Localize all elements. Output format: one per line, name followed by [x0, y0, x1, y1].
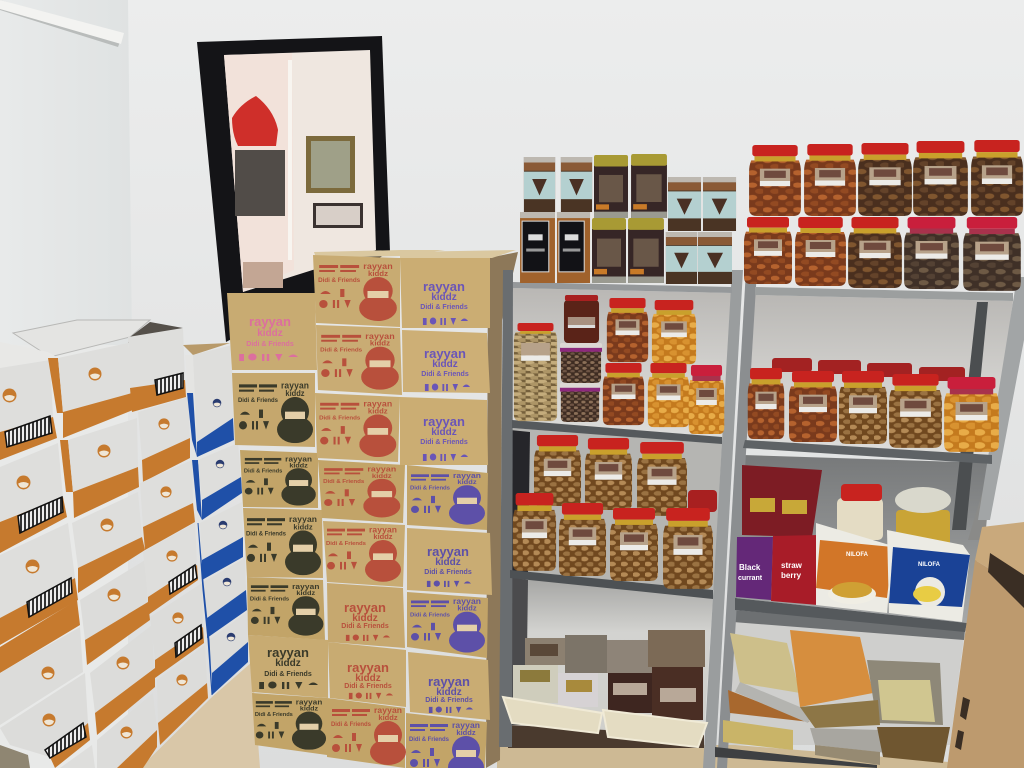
- shelf unit frames: [499, 270, 1024, 768]
- carton red 5: Didi & Friends: [326, 541, 367, 547]
- orange mango box: [816, 523, 893, 613]
- carton purple 5 logo: [407, 528, 492, 595]
- large cardboard box bottom right: [947, 522, 1024, 768]
- carton red 7 logo: Didi & Friends: [344, 683, 392, 690]
- carton purple 3 logo: Didi & Friends: [420, 439, 468, 446]
- baskets with snack packs: [503, 630, 707, 747]
- carton purple 1 logo: rayyan: [423, 279, 465, 294]
- carton dark 6: kiddz: [300, 706, 319, 713]
- carton red 4: Didi & Friends: [323, 479, 364, 485]
- carton purple 8: Didi & Friends: [409, 737, 450, 743]
- carton purple 6: rayyan: [453, 597, 481, 606]
- carton dark 5 logo: [248, 635, 328, 698]
- clear snack bags: [607, 630, 705, 720]
- brown cartons: middle column: [313, 250, 445, 768]
- carton dark 4: rayyan: [292, 582, 320, 591]
- carton dark 2: Didi & Friends: [244, 469, 282, 474]
- carton purple 5 logo: kiddz: [435, 557, 461, 568]
- carton purple 8: rayyan: [452, 720, 480, 730]
- carton dark 4: Didi & Friends: [250, 597, 289, 603]
- carton purple 6: kiddz: [457, 604, 477, 613]
- carton purple 3 logo: rayyan: [423, 414, 465, 429]
- carton red 6 logo: rayyan: [344, 600, 386, 615]
- carton red 2: Didi & Friends: [320, 347, 363, 353]
- carton purple 7 logo: rayyan: [428, 674, 470, 689]
- carton pink: kiddz: [257, 328, 283, 339]
- carton purple 5 logo: rayyan: [427, 544, 469, 559]
- left shelf level 2 jars: [513, 435, 717, 589]
- carton dark 6: Didi & Friends: [255, 712, 293, 718]
- carton purple 2 logo: [402, 330, 490, 393]
- carton red 6 logo: Didi & Friends: [341, 623, 389, 630]
- red foil bags: [742, 465, 822, 537]
- carton red 7 logo: rayyan: [347, 660, 389, 675]
- blue banana box: NILOFA: [918, 562, 941, 568]
- yellow biscuit jar: [895, 487, 951, 546]
- carton dark 1: kiddz: [285, 389, 305, 398]
- carton dark 6: [252, 693, 327, 755]
- carton red 7 logo: kiddz: [355, 673, 381, 684]
- brown cartons: right column: [400, 250, 518, 768]
- carton purple 5 logo: Didi & Friends: [424, 569, 472, 576]
- column 4 with blue bands: [183, 343, 230, 355]
- carton red 1: rayyan: [363, 261, 393, 271]
- carton pink: Didi & Friends: [246, 341, 294, 348]
- dark cabinet: [235, 150, 285, 216]
- carton purple 8: [406, 713, 487, 768]
- carton red 4: kiddz: [372, 472, 392, 480]
- carton red 5: kiddz: [373, 532, 393, 541]
- carton dark 4: [247, 577, 325, 640]
- carton dark 5 logo: Didi & Friends: [264, 671, 312, 678]
- carton purple 1 logo: kiddz: [431, 292, 457, 303]
- barcodes: [5, 373, 202, 758]
- purple blackcurrant box: [736, 537, 773, 600]
- items on floor: [243, 262, 283, 288]
- carton dark 2: [240, 450, 318, 508]
- carton red 2: rayyan: [365, 331, 395, 341]
- carton purple 6: Didi & Friends: [410, 612, 450, 618]
- carton dark 5 logo: kiddz: [275, 658, 301, 669]
- ceiling moulding: [0, 0, 124, 47]
- purple blackcurrant box: Black: [739, 563, 761, 572]
- carton red 2: kiddz: [370, 339, 390, 348]
- carton red 3: [315, 393, 400, 462]
- carton red 1: Didi & Friends: [318, 277, 361, 284]
- carton dark 3: [243, 508, 323, 578]
- carton dark 1: rayyan: [281, 380, 309, 391]
- carton purple 7 logo: [408, 652, 490, 720]
- blue banana box: [887, 530, 970, 622]
- right shelf level 2 jars: [748, 358, 999, 452]
- doorway: [197, 36, 390, 342]
- carton purple 4: rayyan: [453, 471, 481, 480]
- carton dark 2: rayyan: [285, 455, 312, 463]
- basket left: [503, 697, 602, 733]
- left wall: [0, 0, 132, 345]
- carton purple 6: [407, 592, 488, 658]
- carton purple 4: Didi & Friends: [410, 486, 450, 491]
- carton pink: [227, 293, 317, 370]
- column 1: [0, 360, 53, 432]
- brown cartons: left column: [227, 293, 328, 755]
- carton dark 1: [232, 373, 315, 447]
- carton red 8: [327, 698, 406, 768]
- red strawberry box: berry: [781, 571, 802, 580]
- right shelf level 3 products: [736, 465, 970, 622]
- carton red 1: kiddz: [368, 269, 388, 278]
- carton dark 1: Didi & Friends: [238, 397, 279, 404]
- purple blackcurrant box: currant: [738, 575, 763, 582]
- carton red 1: [313, 255, 400, 327]
- orange mango box: NILOFA: [846, 552, 869, 558]
- carton red 7 logo: [328, 642, 406, 707]
- carton purple 2 logo: kiddz: [432, 359, 458, 370]
- framed picture: [306, 136, 355, 193]
- carton red 8: rayyan: [374, 705, 402, 715]
- carton red 6 logo: kiddz: [352, 613, 378, 624]
- carton red 5: [323, 521, 405, 587]
- snack bags on bottom right shelf: [723, 630, 950, 765]
- floor: [140, 662, 260, 768]
- open top flap: [13, 320, 150, 357]
- carton dark 3: rayyan: [289, 514, 317, 524]
- carton purple 3 logo: [400, 397, 488, 465]
- carton purple 1 logo: [400, 258, 490, 328]
- carton purple 7 logo: kiddz: [436, 687, 462, 698]
- carton dark 4: kiddz: [296, 590, 316, 597]
- carton purple 3 logo: kiddz: [431, 427, 457, 438]
- red lid jars on top of right shelf: [744, 140, 1023, 291]
- carton purple 8: kiddz: [456, 728, 476, 737]
- side faces: [486, 252, 518, 768]
- blue logo dots: [213, 399, 235, 641]
- carton red 6 logo: [327, 583, 405, 648]
- carton red 4: rayyan: [367, 465, 396, 474]
- carton purple 1 logo: Didi & Friends: [420, 304, 468, 311]
- small picture: [313, 203, 363, 228]
- carton red 3: kiddz: [368, 407, 388, 415]
- left shelf level 1 jars: [514, 295, 724, 434]
- carton dark 3: kiddz: [293, 522, 313, 531]
- white cookie jar: [837, 484, 883, 540]
- orange logo dots: [3, 368, 188, 739]
- carton red 8: Didi & Friends: [331, 722, 372, 728]
- floor behind shelves: [497, 745, 1024, 768]
- carton pink: rayyan: [249, 314, 291, 329]
- carton dark 5 logo: rayyan: [267, 645, 309, 660]
- carton dark 2: kiddz: [289, 463, 308, 469]
- carton red 2: [316, 325, 402, 395]
- printed snack packs: [513, 635, 607, 707]
- red strawberry box: [771, 535, 819, 605]
- white cartons stack: [0, 320, 248, 768]
- carton dark 3: Didi & Friends: [246, 531, 287, 537]
- carton purple 2 logo: rayyan: [424, 346, 466, 361]
- carton red 3: Didi & Friends: [319, 415, 361, 421]
- red strawberry box: straw: [781, 561, 803, 570]
- shelf backs: [508, 288, 1013, 748]
- carton purple 7 logo: Didi & Friends: [425, 697, 473, 704]
- carton dark 6: rayyan: [296, 698, 323, 706]
- carton red 5: rayyan: [369, 525, 397, 534]
- basket right: [603, 710, 707, 747]
- carton red 4: [318, 460, 405, 523]
- red bag: [232, 96, 278, 146]
- carton red 8: kiddz: [378, 713, 398, 722]
- carton purple 4: [407, 465, 488, 530]
- column 2: [48, 358, 63, 413]
- carton red 3: rayyan: [363, 399, 392, 409]
- column 3: [138, 397, 190, 460]
- carton purple 4: kiddz: [457, 479, 477, 486]
- small jars on top of left shelf: [520, 154, 736, 284]
- carton purple 2 logo: Didi & Friends: [421, 371, 469, 378]
